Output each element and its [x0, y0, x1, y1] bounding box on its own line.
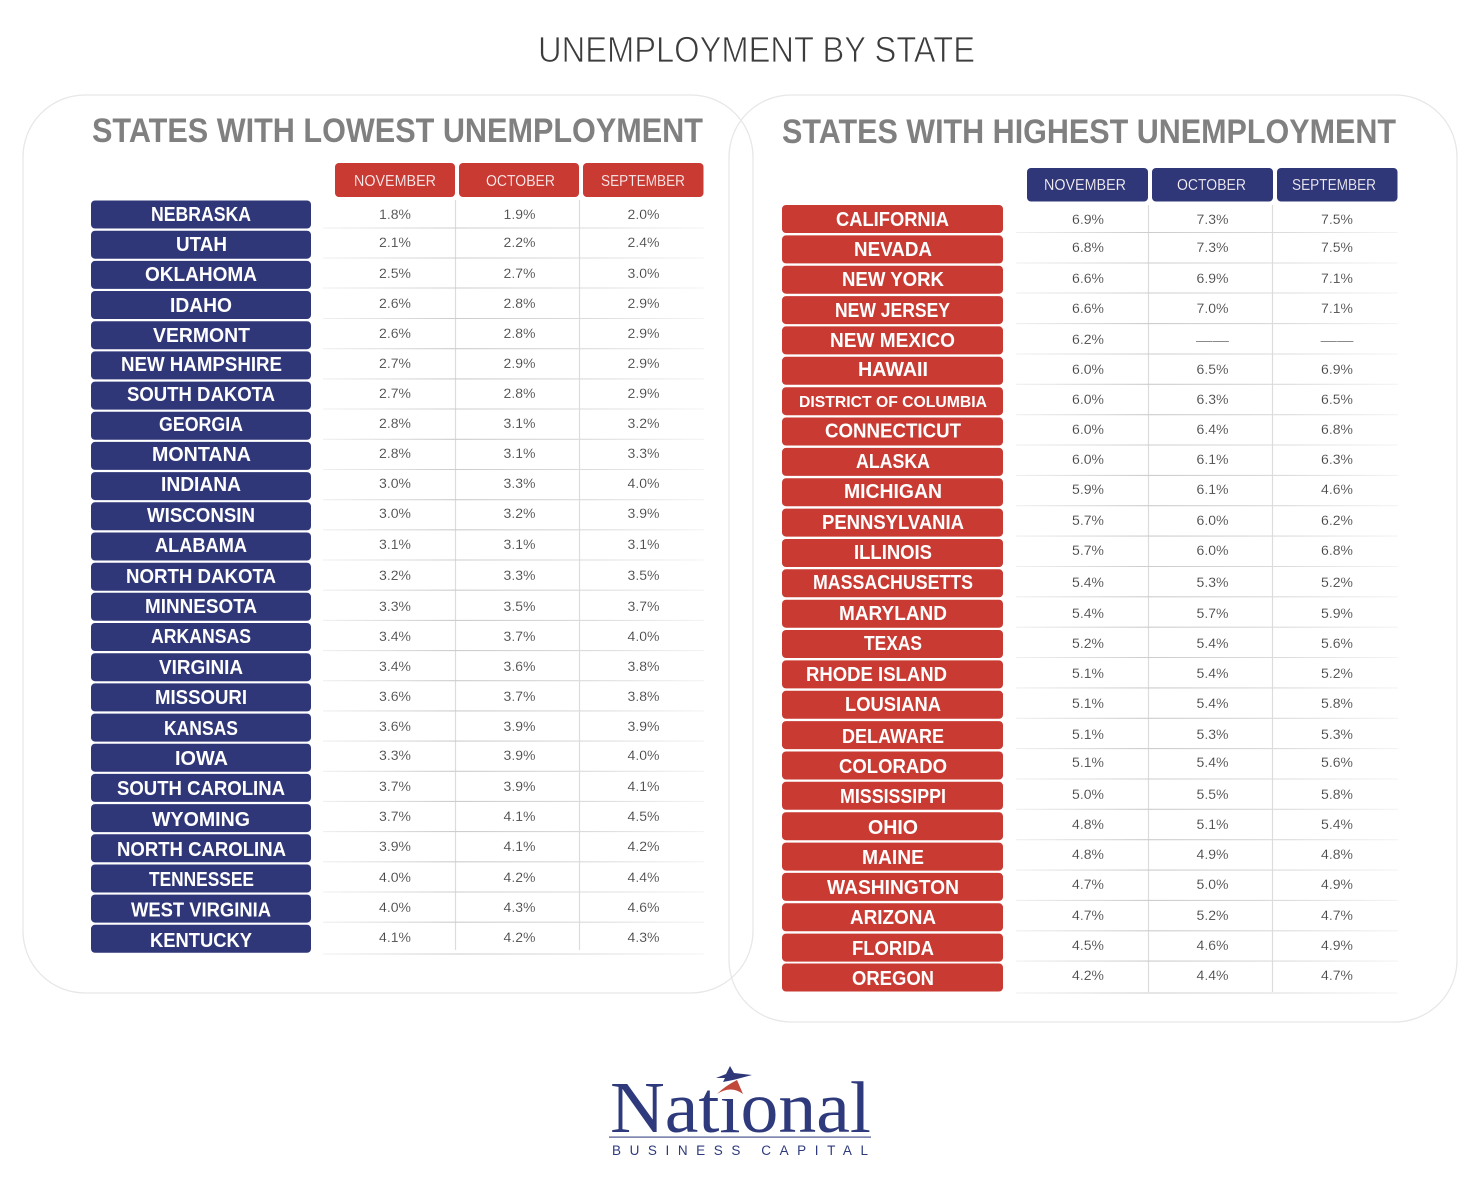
- month headers: highest: SEPTEMBER: [1292, 177, 1376, 194]
- row: Rhode Island: RHODE ISLAND: [806, 664, 947, 686]
- row: Rhode Island: 5.4%: [1197, 665, 1228, 681]
- row: Nevada: 6.8%: [1072, 239, 1104, 255]
- panel border: lowest: [23, 95, 753, 993]
- row: Wyoming: 4.5%: [628, 808, 659, 824]
- row: Minnesota: [91, 593, 659, 621]
- logo wordmark: National: [610, 1067, 871, 1148]
- month headers: highest: [1027, 168, 1398, 202]
- row: New Mexico: ——: [1320, 332, 1354, 348]
- row: Massachusetts: 5.3%: [1197, 574, 1228, 590]
- row: Illinois: 6.8%: [1321, 542, 1353, 558]
- row: Virginia: 3.4%: [379, 658, 411, 674]
- row: Michigan: 5.9%: [1072, 481, 1104, 497]
- row: Montana: 3.1%: [504, 445, 535, 461]
- row: South Carolina: SOUTH CAROLINA: [117, 778, 285, 800]
- row: Iowa: [91, 744, 659, 772]
- row: North Dakota: NORTH DAKOTA: [126, 566, 276, 588]
- row: Idaho: 2.9%: [628, 295, 659, 311]
- row: Wisconsin: 3.0%: [379, 505, 411, 521]
- row: Delaware: [782, 721, 1353, 749]
- row: West Virginia: [91, 895, 659, 923]
- row: Iowa: 3.9%: [504, 747, 535, 763]
- row: Washington: 5.0%: [1197, 876, 1228, 892]
- row: Nevada: NEVADA: [854, 239, 932, 261]
- row: Wyoming: WYOMING: [152, 809, 250, 831]
- row: District of Columbia: 6.3%: [1197, 391, 1228, 407]
- row: Nebraska: NEBRASKA: [151, 204, 251, 226]
- row: South Carolina: [91, 774, 659, 802]
- row: Utah: [91, 231, 659, 259]
- row: South Dakota: 2.7%: [379, 385, 411, 401]
- panel border: highest: [729, 95, 1457, 1022]
- row: Arizona: ARIZONA: [850, 907, 936, 929]
- row: Utah: 2.1%: [379, 234, 411, 250]
- row: California: 6.9%: [1072, 211, 1104, 227]
- row: Missouri: [91, 683, 659, 711]
- row: Idaho: [91, 291, 659, 319]
- row: District of Columbia: DISTRICT OF COLUMBIA: [799, 394, 987, 411]
- month headers: highest: NOVEMBER: [1044, 177, 1126, 194]
- row: Michigan: [782, 478, 1353, 506]
- logo rule: [609, 1136, 871, 1138]
- row: Alaska: 6.0%: [1072, 451, 1104, 467]
- row: South Carolina: 4.1%: [628, 778, 659, 794]
- row: Virginia: [91, 653, 659, 681]
- row: Oregon: 4.4%: [1197, 967, 1228, 983]
- row: Alaska: 6.1%: [1197, 451, 1228, 467]
- row: New Mexico: NEW MEXICO: [830, 330, 955, 352]
- row: West Virginia: 4.3%: [504, 899, 535, 915]
- row: Maryland: [782, 600, 1353, 628]
- panel: states with highest unemployment: [729, 95, 1457, 1022]
- row: Hawaii: 6.5%: [1197, 361, 1228, 377]
- row: Tennessee: 4.2%: [504, 869, 535, 885]
- mask over the i dot: [722, 1078, 742, 1099]
- row: South Carolina: 3.7%: [379, 778, 411, 794]
- row: Vermont: [91, 321, 659, 349]
- row: Nebraska: [91, 200, 659, 228]
- row: Virginia: VIRGINIA: [159, 657, 243, 679]
- row: Minnesota: 3.3%: [379, 598, 411, 614]
- row: Arizona: 4.7%: [1321, 907, 1353, 923]
- row: New Mexico: [782, 326, 1354, 354]
- row: Pennsylvania: PENNSYLVANIA: [822, 512, 964, 534]
- row: Missouri: 3.6%: [379, 688, 411, 704]
- row: Montana: 2.8%: [379, 445, 411, 461]
- row: New Hampshire: 2.9%: [504, 355, 535, 371]
- row: District of Columbia: 6.0%: [1072, 391, 1104, 407]
- row: Vermont: 2.8%: [504, 325, 535, 341]
- row: Oregon: [782, 964, 1353, 992]
- row: Washington: [782, 873, 1353, 901]
- row: Georgia: GEORGIA: [159, 414, 243, 436]
- row: Washington: 4.7%: [1072, 876, 1104, 892]
- icon: star: [716, 1066, 752, 1082]
- row: Kansas: 3.9%: [504, 718, 535, 734]
- row: Alaska: ALASKA: [856, 451, 930, 473]
- month headers: lowest: [335, 163, 704, 197]
- row: North Carolina: 4.1%: [504, 838, 535, 854]
- row: Rhode Island: [782, 660, 1353, 688]
- row: Minnesota: 3.5%: [504, 598, 535, 614]
- row: Arkansas: 3.4%: [379, 628, 411, 644]
- row: Alabama: 3.1%: [379, 536, 411, 552]
- row: Massachusetts: [782, 569, 1353, 597]
- row: Texas: [782, 630, 1353, 658]
- row: West Virginia: 4.0%: [379, 899, 411, 915]
- row: Arkansas: [91, 623, 659, 651]
- row: Wyoming: 4.1%: [504, 808, 535, 824]
- row: Hawaii: 6.0%: [1072, 361, 1104, 377]
- row: Oregon: 4.7%: [1321, 967, 1353, 983]
- row: South Dakota: 2.9%: [628, 385, 659, 401]
- row: New York: 6.6%: [1072, 270, 1104, 286]
- row: Texas: 5.2%: [1072, 635, 1104, 651]
- row: Missouri: MISSOURI: [155, 687, 247, 709]
- row: Connecticut: [782, 418, 1353, 446]
- row: Hawaii: HAWAII: [858, 359, 928, 381]
- row: South Carolina: 3.9%: [504, 778, 535, 794]
- row: New Hampshire: [91, 351, 659, 379]
- row: Hawaii: 6.9%: [1321, 361, 1353, 377]
- table grid: lowest: [323, 200, 704, 954]
- row: Lousiana: 5.4%: [1197, 695, 1228, 711]
- row: Oklahoma: OKLAHOMA: [145, 264, 257, 286]
- row: Georgia: 3.2%: [628, 415, 659, 431]
- row: Illinois: ILLINOIS: [854, 542, 932, 564]
- row: Missouri: 3.8%: [628, 688, 659, 704]
- row: Kentucky: 4.2%: [504, 929, 535, 945]
- row: Idaho: IDAHO: [170, 295, 232, 317]
- row: Pennsylvania: 6.2%: [1321, 512, 1353, 528]
- row: Indiana: 3.0%: [379, 475, 411, 491]
- row: Pennsylvania: [782, 509, 1353, 537]
- row: Rhode Island: 5.1%: [1072, 665, 1104, 681]
- row: California: 7.3%: [1197, 211, 1228, 227]
- row: New Jersey: 7.0%: [1197, 300, 1228, 316]
- row: Indiana: [91, 472, 659, 500]
- row: Georgia: 2.8%: [379, 415, 411, 431]
- row: Nebraska: 1.9%: [504, 206, 535, 222]
- row: Wyoming: [91, 804, 659, 832]
- row: New Jersey: [782, 296, 1353, 324]
- row: Illinois: 6.0%: [1197, 542, 1228, 558]
- row: North Dakota: 3.3%: [504, 567, 535, 583]
- row: Arkansas: ARKANSAS: [151, 626, 251, 648]
- row: Vermont: VERMONT: [153, 325, 250, 347]
- row: North Carolina: 3.9%: [379, 838, 411, 854]
- row: Mississippi: 5.8%: [1321, 786, 1353, 802]
- row: Mississippi: [782, 782, 1353, 810]
- row: Maine: MAINE: [862, 847, 924, 869]
- row: Ohio: [782, 812, 1353, 840]
- row: District of Columbia: 6.5%: [1321, 391, 1353, 407]
- row: Massachusetts: 5.4%: [1072, 574, 1104, 590]
- row: Wisconsin: WISCONSIN: [147, 505, 255, 527]
- row: Maine: [782, 843, 1353, 871]
- table grid: highest: [1016, 205, 1398, 993]
- row: North Carolina: NORTH CAROLINA: [117, 839, 286, 861]
- row: Minnesota: MINNESOTA: [145, 596, 257, 618]
- row: Missouri: 3.7%: [504, 688, 535, 704]
- row: Arkansas: 4.0%: [628, 628, 659, 644]
- row: Nevada: [782, 235, 1353, 263]
- row: New Hampshire: 2.9%: [628, 355, 659, 371]
- row: Alabama: [91, 532, 659, 560]
- row: Alaska: [782, 448, 1353, 476]
- row: Texas: 5.4%: [1197, 635, 1228, 651]
- row: Arizona: 5.2%: [1197, 907, 1228, 923]
- row: Iowa: IOWA: [175, 748, 228, 770]
- row: West Virginia: WEST VIRGINIA: [131, 900, 271, 922]
- row: Lousiana: [782, 691, 1353, 719]
- row: New Jersey: NEW JERSEY: [835, 300, 951, 322]
- row: Indiana: 4.0%: [628, 475, 659, 491]
- row: Kansas: [91, 714, 659, 742]
- logo: National Business Capital: [609, 1066, 871, 1158]
- row: Alaska: 6.3%: [1321, 451, 1353, 467]
- month headers: lowest: SEPTEMBER: [601, 173, 685, 190]
- row: Ohio: 5.4%: [1321, 816, 1353, 832]
- row: Connecticut: 6.8%: [1321, 421, 1353, 437]
- row: Vermont: 2.6%: [379, 325, 411, 341]
- row: Virginia: 3.8%: [628, 658, 659, 674]
- row: Mississippi: MISSISSIPPI: [840, 786, 946, 808]
- row: Wisconsin: [91, 502, 659, 530]
- row: Lousiana: 5.8%: [1321, 695, 1353, 711]
- row: Maryland: MARYLAND: [839, 603, 947, 625]
- row: Utah: 2.4%: [628, 234, 659, 250]
- month headers: lowest: OCTOBER: [486, 173, 555, 190]
- row: Maine: 4.8%: [1072, 846, 1104, 862]
- row: Nevada: 7.3%: [1197, 239, 1228, 255]
- row: Delaware: DELAWARE: [842, 726, 944, 748]
- row: Massachusetts: 5.2%: [1321, 574, 1353, 590]
- row: Texas: TEXAS: [864, 633, 922, 655]
- row: Connecticut: 6.4%: [1197, 421, 1228, 437]
- row: Oklahoma: 2.5%: [379, 265, 411, 281]
- row: Iowa: 4.0%: [628, 747, 659, 763]
- row: Kentucky: 4.1%: [379, 929, 411, 945]
- row: Kansas: 3.6%: [379, 718, 411, 734]
- row: Oklahoma: [91, 261, 659, 289]
- row: Maryland: 5.9%: [1321, 605, 1353, 621]
- heading: highest: STATES WITH HIGHEST UNEMPLOYMENT: [782, 113, 1396, 151]
- row: California: CALIFORNIA: [836, 209, 949, 231]
- row: Colorado: 5.4%: [1197, 754, 1228, 770]
- row: Idaho: 2.8%: [504, 295, 535, 311]
- panel: states with lowest unemployment: [23, 95, 753, 993]
- row: Florida: 4.5%: [1072, 937, 1104, 953]
- row: Arizona: [782, 903, 1353, 931]
- row: Delaware: 5.3%: [1321, 726, 1353, 742]
- row: Montana: [91, 442, 659, 470]
- row: Colorado: 5.6%: [1321, 754, 1353, 770]
- month headers: lowest: NOVEMBER: [354, 173, 436, 190]
- row: Georgia: 3.1%: [504, 415, 535, 431]
- row: Mississippi: 5.5%: [1197, 786, 1228, 802]
- row: Pennsylvania: 5.7%: [1072, 512, 1104, 528]
- row: Lousiana: LOUSIANA: [845, 694, 941, 716]
- row: Michigan: 6.1%: [1197, 481, 1228, 497]
- row: Lousiana: 5.1%: [1072, 695, 1104, 711]
- row: Georgia: [91, 412, 659, 440]
- row: New Jersey: 6.6%: [1072, 300, 1104, 316]
- row: Pennsylvania: 6.0%: [1197, 512, 1228, 528]
- row: Maine: 4.9%: [1197, 846, 1228, 862]
- row: Alabama: 3.1%: [628, 536, 659, 552]
- row: Wisconsin: 3.2%: [504, 505, 535, 521]
- row: Tennessee: 4.4%: [628, 869, 659, 885]
- row: Maine: 4.8%: [1321, 846, 1353, 862]
- row: Nebraska: 1.8%: [379, 206, 411, 222]
- row: Kansas: 3.9%: [628, 718, 659, 734]
- row: Kentucky: KENTUCKY: [150, 930, 253, 952]
- row: Oregon: 4.2%: [1072, 967, 1104, 983]
- icon: red swoosh: [717, 1080, 743, 1094]
- row: Maryland: 5.7%: [1197, 605, 1228, 621]
- row: Alabama: 3.1%: [504, 536, 535, 552]
- row: Ohio: OHIO: [868, 817, 918, 839]
- row: New York: 7.1%: [1321, 270, 1353, 286]
- row: Washington: 4.9%: [1321, 876, 1353, 892]
- row: Ohio: 4.8%: [1072, 816, 1104, 832]
- row: Mississippi: 5.0%: [1072, 786, 1104, 802]
- row: South Dakota: 2.8%: [504, 385, 535, 401]
- row: Indiana: INDIANA: [161, 474, 241, 496]
- row: Iowa: 3.3%: [379, 747, 411, 763]
- row: New Hampshire: 2.7%: [379, 355, 411, 371]
- row: Massachusetts: MASSACHUSETTS: [813, 572, 973, 594]
- row: Florida: FLORIDA: [852, 938, 934, 960]
- row: Michigan: 4.6%: [1321, 481, 1353, 497]
- row: Maryland: 5.4%: [1072, 605, 1104, 621]
- row: North Dakota: [91, 563, 659, 591]
- row: Vermont: 2.9%: [628, 325, 659, 341]
- row: Arizona: 4.7%: [1072, 907, 1104, 923]
- row: Florida: 4.6%: [1197, 937, 1228, 953]
- row: Oklahoma: 2.7%: [504, 265, 535, 281]
- row: New Hampshire: NEW HAMPSHIRE: [121, 354, 282, 376]
- row: Connecticut: CONNECTICUT: [825, 420, 961, 442]
- row: Florida: [782, 934, 1353, 962]
- row: Ohio: 5.1%: [1197, 816, 1228, 832]
- row: Colorado: 5.1%: [1072, 754, 1104, 770]
- row: Delaware: 5.3%: [1197, 726, 1228, 742]
- row: District of Columbia: [782, 387, 1353, 415]
- row: Wisconsin: 3.9%: [628, 505, 659, 521]
- row: Illinois: [782, 539, 1353, 567]
- row: Idaho: 2.6%: [379, 295, 411, 311]
- row: New York: NEW YORK: [842, 269, 945, 291]
- heading: lowest: STATES WITH LOWEST UNEMPLOYMENT: [92, 112, 703, 150]
- row: Wyoming: 3.7%: [379, 808, 411, 824]
- row: Washington: WASHINGTON: [827, 877, 959, 899]
- row: Montana: MONTANA: [152, 444, 251, 466]
- month headers: highest: OCTOBER: [1177, 177, 1246, 194]
- row: Virginia: 3.6%: [504, 658, 535, 674]
- logo tagline: BUSINESS CAPITAL: [612, 1143, 868, 1158]
- row: West Virginia: 4.6%: [628, 899, 659, 915]
- row: North Carolina: [91, 834, 659, 862]
- row: Florida: 4.9%: [1321, 937, 1353, 953]
- row: South Dakota: SOUTH DAKOTA: [127, 384, 275, 406]
- row: New Mexico: ——: [1196, 332, 1229, 348]
- row: New York: 6.9%: [1197, 270, 1228, 286]
- row: California: [782, 205, 1353, 233]
- row: South Dakota: [91, 382, 659, 410]
- row: Kentucky: 4.3%: [628, 929, 659, 945]
- row: New Mexico: 6.2%: [1072, 331, 1104, 347]
- row: Rhode Island: 5.2%: [1321, 665, 1353, 681]
- row: Texas: 5.6%: [1321, 635, 1353, 651]
- row: Connecticut: 6.0%: [1072, 421, 1104, 437]
- row: Kansas: KANSAS: [164, 718, 238, 740]
- row: Nevada: 7.5%: [1321, 239, 1353, 255]
- row: Utah: UTAH: [176, 234, 227, 256]
- row: Minnesota: 3.7%: [628, 598, 659, 614]
- row: Indiana: 3.3%: [504, 475, 535, 491]
- row: Nebraska: 2.0%: [628, 206, 659, 222]
- row: New York: [782, 266, 1353, 294]
- row: Kentucky: [91, 925, 659, 953]
- row: New Jersey: 7.1%: [1321, 300, 1353, 316]
- row: North Dakota: 3.5%: [628, 567, 659, 583]
- row: Alabama: ALABAMA: [155, 535, 247, 557]
- row: North Dakota: 3.2%: [379, 567, 411, 583]
- row: Oregon: OREGON: [852, 968, 934, 990]
- row: Tennessee: TENNESSEE: [149, 869, 254, 891]
- row: Tennessee: [91, 864, 659, 892]
- row: Tennessee: 4.0%: [379, 869, 411, 885]
- row: Michigan: MICHIGAN: [844, 481, 942, 503]
- row: Hawaii: [782, 357, 1353, 385]
- row: North Carolina: 4.2%: [628, 838, 659, 854]
- row: Oklahoma: 3.0%: [628, 265, 659, 281]
- title: UNEMPLOYMENT BY STATE: [538, 29, 975, 70]
- row: Montana: 3.3%: [628, 445, 659, 461]
- row: Colorado: [782, 752, 1353, 780]
- row: Delaware: 5.1%: [1072, 726, 1104, 742]
- row: Colorado: COLORADO: [839, 756, 947, 778]
- row: Utah: 2.2%: [504, 234, 535, 250]
- row: California: 7.5%: [1321, 211, 1353, 227]
- row: Illinois: 5.7%: [1072, 542, 1104, 558]
- row: Arkansas: 3.7%: [504, 628, 535, 644]
